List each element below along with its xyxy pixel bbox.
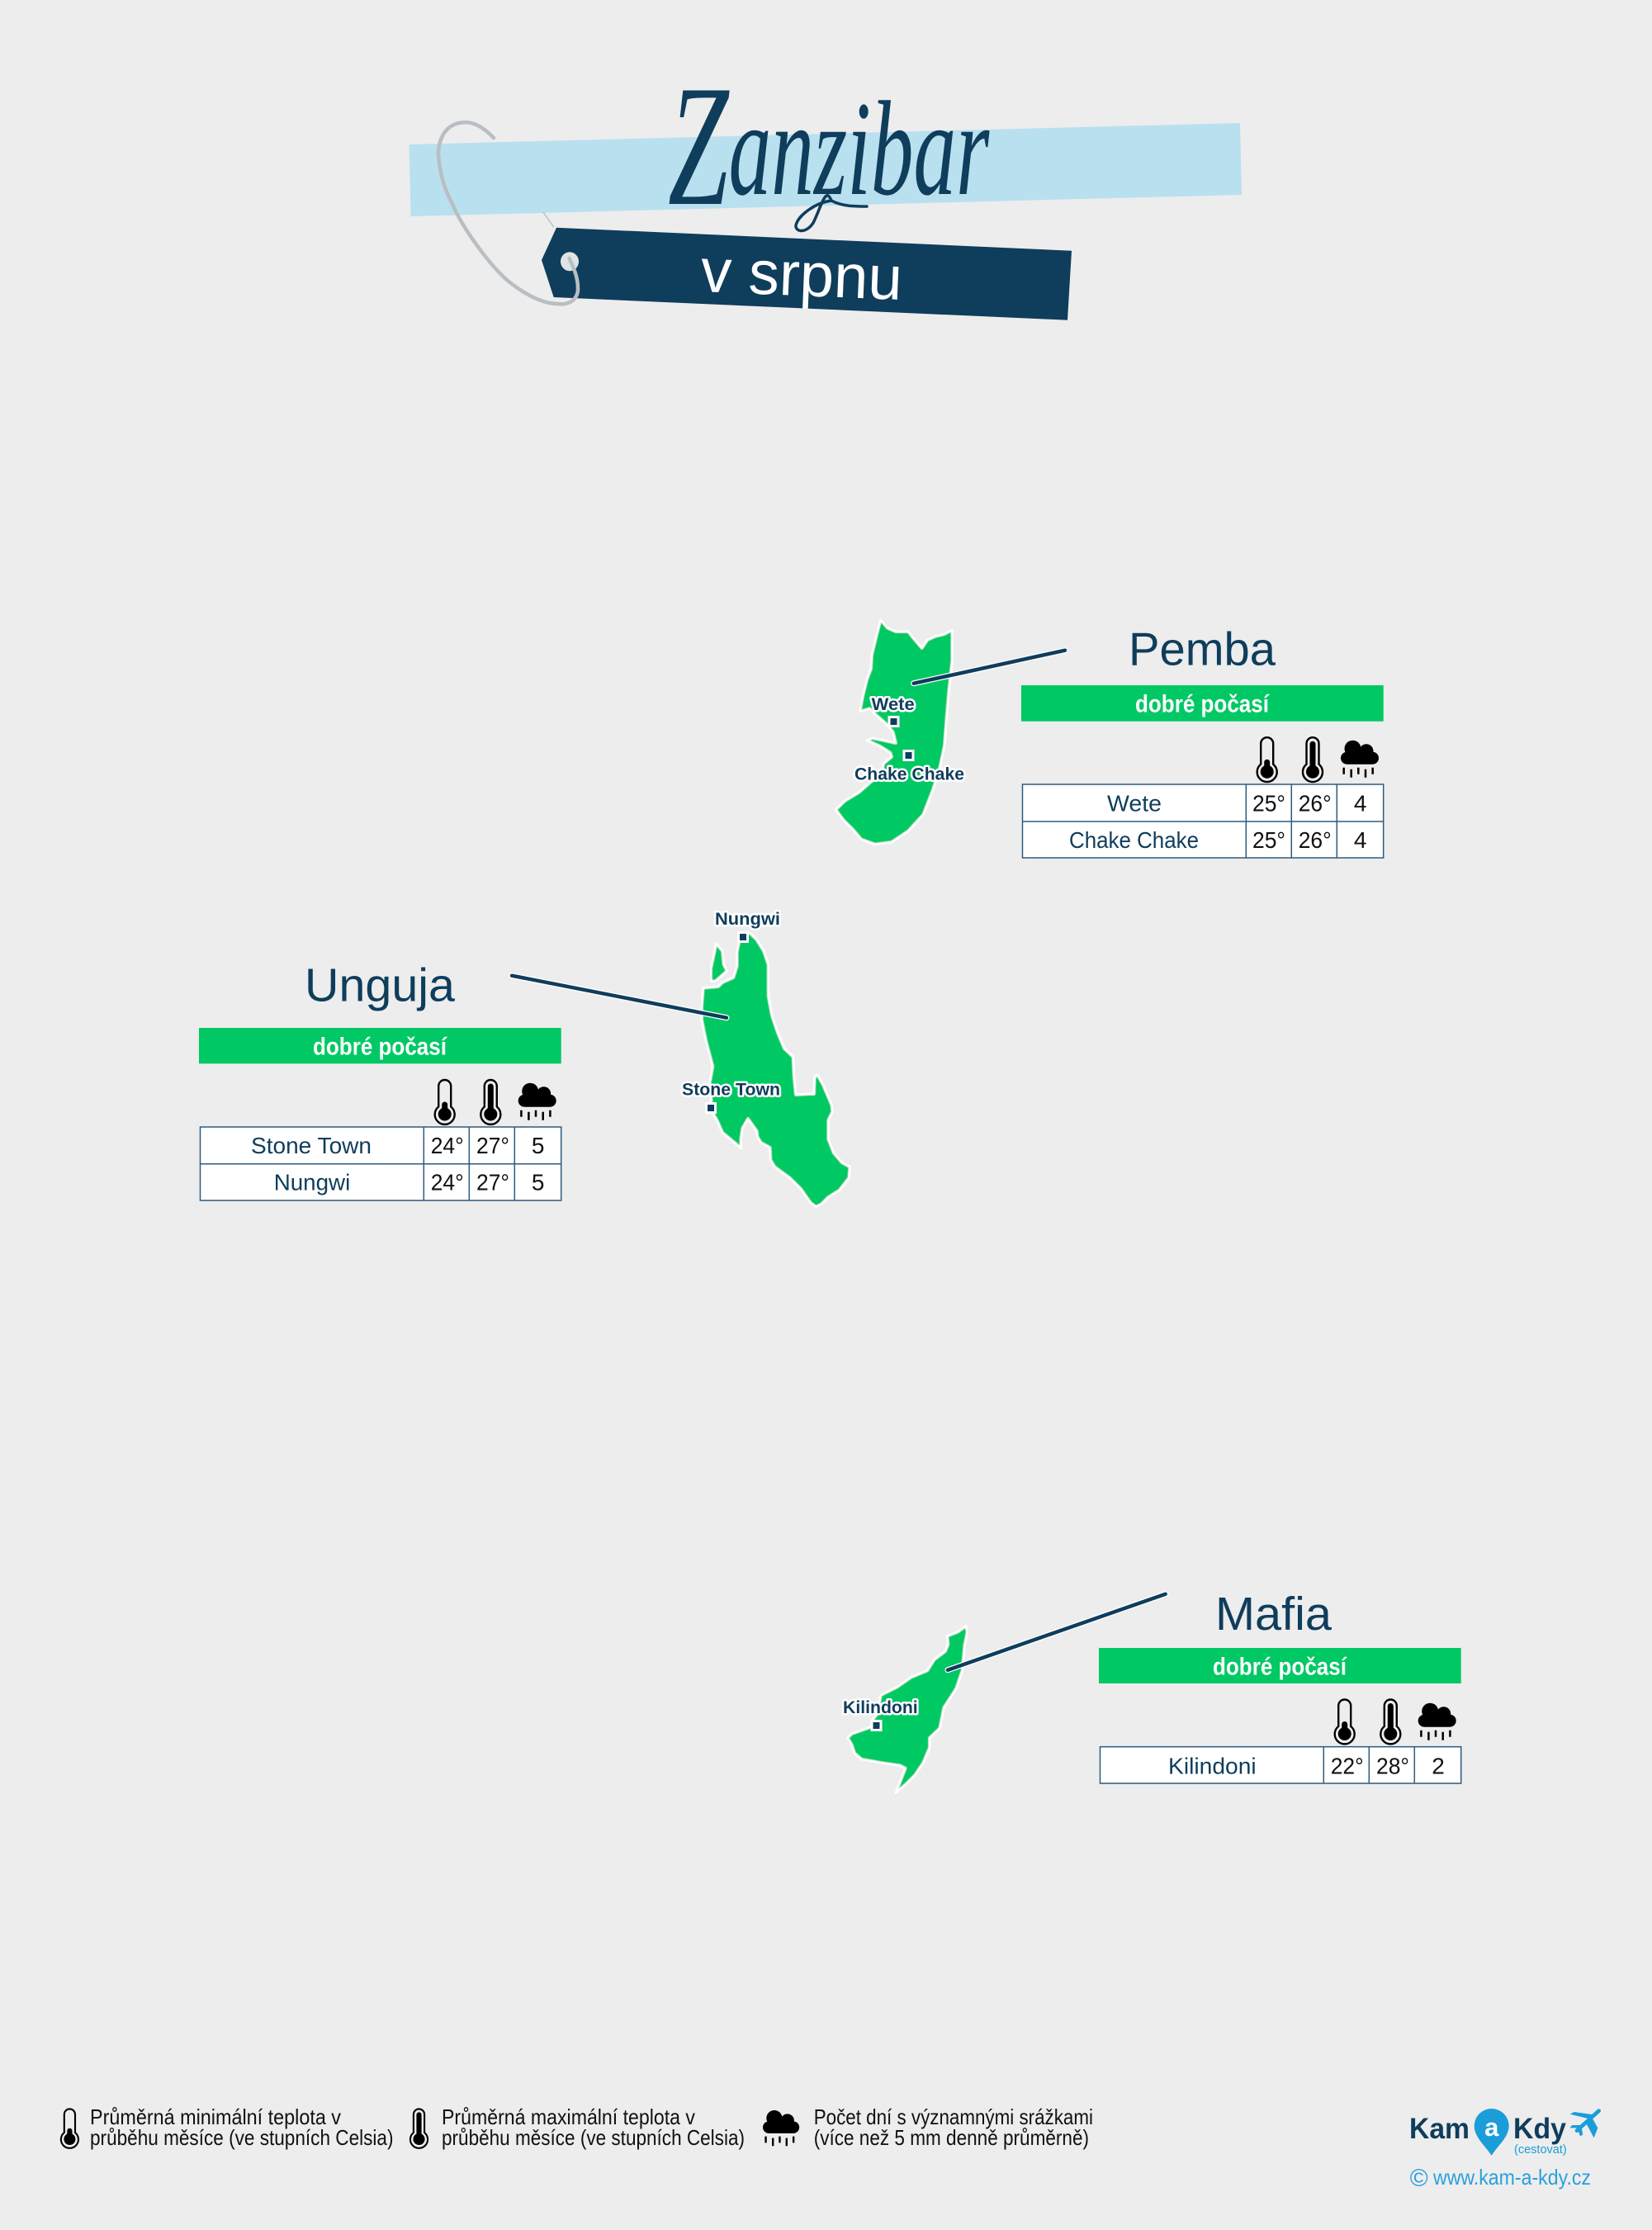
table xyxy=(1100,1747,1461,1783)
website: www.kam-a-kdy.cz xyxy=(1432,2165,1591,2190)
weather bar xyxy=(199,1028,561,1063)
legend text: max temperature xyxy=(442,2105,745,2150)
subtitle: v srpnu xyxy=(699,235,904,313)
table: 5 xyxy=(532,1170,544,1195)
icon: max temperature xyxy=(480,1080,500,1124)
logo word: Kdy: Kdy xyxy=(1513,2113,1567,2145)
table: 27° xyxy=(476,1133,509,1158)
icon: min temperature xyxy=(61,2109,78,2148)
table: Kilindoni xyxy=(1168,1753,1257,1778)
dark luggage tag xyxy=(542,228,1072,320)
icon: airplane xyxy=(1570,2111,1599,2138)
heading: Pemba xyxy=(1129,623,1276,676)
table: 26° xyxy=(1299,827,1332,853)
legend text: rain: Počet dní s významnými srážkami xyxy=(814,2105,1093,2129)
pin letter: a xyxy=(1484,2113,1499,2142)
heading: Mafia xyxy=(1215,1588,1332,1641)
legend xyxy=(61,2105,1093,2150)
map: Unguja island xyxy=(512,909,850,1207)
table: 24° xyxy=(431,1133,464,1158)
legend text: rain: (více než 5 mm denně průměrně) xyxy=(814,2125,1089,2150)
callout line xyxy=(948,1594,1166,1670)
island shape xyxy=(835,620,952,845)
logo xyxy=(1409,2109,1599,2192)
icon: rain xyxy=(763,2110,799,2146)
map: Pemba island xyxy=(835,620,1065,845)
icon: rain xyxy=(1418,1703,1456,1740)
panel: Mafia xyxy=(1099,1588,1461,1783)
table: 25° xyxy=(1252,827,1285,853)
weather bar xyxy=(1099,1648,1461,1683)
table: 28° xyxy=(1376,1753,1409,1778)
marker: Chake Chake xyxy=(904,751,913,760)
weather bar xyxy=(1021,685,1384,722)
table: 27° xyxy=(476,1170,509,1195)
island shape xyxy=(702,933,850,1207)
title flourish xyxy=(796,196,867,230)
label: Nungwi: Nungwi xyxy=(715,909,780,929)
callout line xyxy=(914,651,1065,684)
legend text: min temperature xyxy=(90,2105,393,2150)
title text: Z xyxy=(668,50,730,241)
map: Mafia island xyxy=(843,1594,1166,1793)
table: Stone Town xyxy=(251,1133,372,1158)
legend text: min temperature: průběhu měsíce (ve stupních Celsia) xyxy=(90,2125,393,2150)
icon: max temperature xyxy=(410,2109,428,2148)
icon: rain xyxy=(1341,741,1379,778)
weather text: dobré počasí xyxy=(1135,691,1270,718)
islet xyxy=(711,944,727,981)
panel: Unguja xyxy=(199,959,561,1200)
table xyxy=(1022,784,1384,858)
tag hole xyxy=(561,252,579,271)
weather text: dobré počasí xyxy=(313,1034,447,1061)
table: 5 xyxy=(532,1133,544,1158)
logo word: Kam: Kam xyxy=(1409,2113,1470,2145)
marker: Kilindoni xyxy=(872,1721,881,1730)
string connector xyxy=(543,212,554,227)
string loop xyxy=(438,122,578,304)
table: 22° xyxy=(1331,1753,1364,1778)
icon: min temperature xyxy=(1335,1699,1355,1744)
table: 26° xyxy=(1299,791,1332,817)
heading: Unguja xyxy=(305,959,455,1011)
table: 25° xyxy=(1252,791,1285,817)
table: 24° xyxy=(431,1170,464,1195)
legend text: max temperature: průběhu měsíce (ve stupních Celsia) xyxy=(442,2125,745,2150)
marker: Nungwi xyxy=(738,933,748,941)
label: Stone Town: Stone Town xyxy=(682,1080,780,1100)
label: Kilindoni: Kilindoni xyxy=(843,1697,918,1717)
table: Chake Chake xyxy=(1069,827,1199,853)
icon: max temperature xyxy=(1303,737,1323,782)
marker: Stone Town xyxy=(707,1103,715,1113)
legend text: min temperature: Průměrná minimální teplota v xyxy=(90,2105,341,2129)
panel: Pemba xyxy=(1021,623,1384,858)
weather text: dobré počasí xyxy=(1213,1653,1347,1681)
icon: rain xyxy=(518,1083,556,1120)
title tag xyxy=(409,50,1242,320)
icon: min temperature xyxy=(435,1080,455,1124)
callout line xyxy=(512,976,727,1018)
title text: anzibar xyxy=(729,73,990,224)
icon: max temperature xyxy=(1380,1699,1400,1744)
icon: map pin xyxy=(1474,2109,1509,2156)
logo tagline: (cestovat) xyxy=(1514,2142,1567,2157)
table: 2 xyxy=(1432,1753,1445,1778)
copyright mark: © xyxy=(1410,2165,1428,2192)
legend text: max temperature: Průměrná maximální teplota v xyxy=(442,2105,695,2129)
light blue ribbon xyxy=(409,123,1242,216)
marker: Wete xyxy=(889,717,898,727)
table: 4 xyxy=(1354,827,1366,853)
table: Wete xyxy=(1107,791,1162,817)
island shape xyxy=(848,1626,968,1793)
table: Nungwi xyxy=(274,1170,350,1195)
legend text: rain xyxy=(814,2105,1093,2150)
table xyxy=(200,1127,561,1200)
icon: min temperature xyxy=(1257,737,1277,782)
label: Chake Chake: Chake Chake xyxy=(854,764,964,784)
label: Wete: Wete xyxy=(872,694,915,714)
table: 4 xyxy=(1354,791,1366,817)
